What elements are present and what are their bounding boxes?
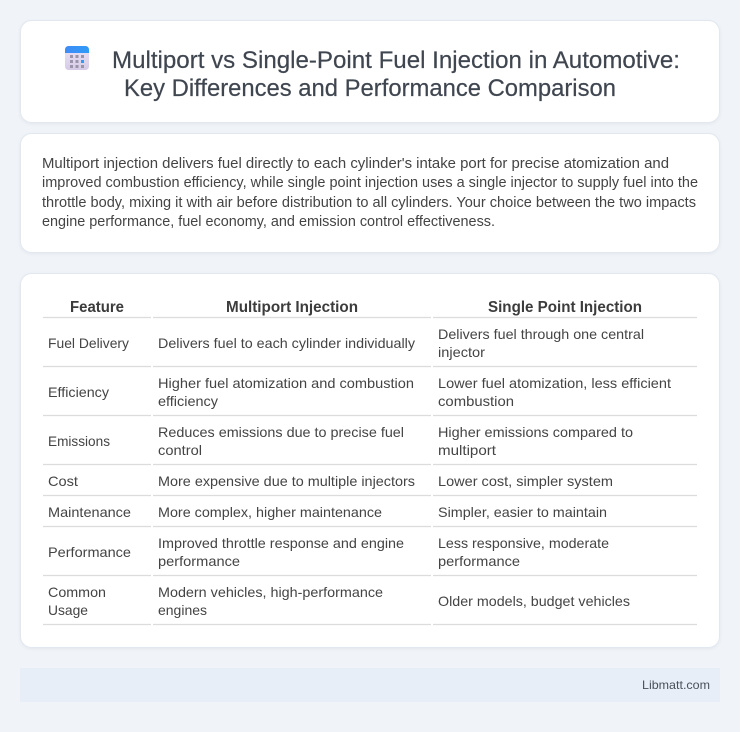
row: common usage: Usage <box>48 602 88 618</box>
row: performance: Improved throttle response and engine <box>158 535 404 551</box>
title: Multiport vs Single-Point Fuel Injection in Automotive: <box>112 47 680 74</box>
panel: introduction <box>20 134 720 252</box>
row: fuel delivery: Delivers fuel to each cylinder individually <box>158 335 415 351</box>
row: common usage: Common <box>48 584 106 600</box>
row: performance: Less responsive, moderate <box>438 535 609 551</box>
row: efficiency: Efficiency <box>48 384 109 400</box>
table header: Multiport Injection <box>226 299 358 316</box>
row: fuel delivery: Fuel Delivery <box>48 335 129 351</box>
footer <box>20 668 720 702</box>
row: maintenance <box>48 504 607 520</box>
row: common usage: Older models, budget vehicles <box>438 593 630 609</box>
row: cost: Cost <box>48 473 78 489</box>
row: performance: performance <box>438 553 520 569</box>
icon: calculator keypad <box>65 46 89 70</box>
row: performance: performance <box>158 553 240 569</box>
text block: introduction paragraph: engine performance, fuel economy, and emission control effectiveness. <box>42 214 495 230</box>
row: emissions <box>48 424 633 458</box>
text block: introduction paragraph: Multiport injection delivers fuel directly to each cylinder's intake port for precise atomization and <box>42 156 669 172</box>
row: efficiency: efficiency <box>158 393 218 409</box>
row: cost: More expensive due to multiple injectors <box>158 473 415 489</box>
text block: introduction paragraph: throttle body, mixing it with air before distribution to all cylinders. Your choice between the two impacts <box>42 195 696 211</box>
text block: introduction paragraph: improved combustion efficiency, while single point injection uses a single injector to supply fuel into the <box>42 175 698 191</box>
table header: Single Point Injection <box>488 299 642 316</box>
row: emissions: Reduces emissions due to precise fuel <box>158 424 404 440</box>
row: fuel delivery: Delivers fuel through one central <box>438 326 644 342</box>
row: cost <box>48 473 613 489</box>
table header: Feature <box>70 299 124 316</box>
row: common usage: Modern vehicles, high-performance <box>158 584 383 600</box>
row: emissions: control <box>158 442 202 458</box>
row: efficiency: Lower fuel atomization, less efficient <box>438 375 671 391</box>
row: emissions: Emissions <box>48 433 110 449</box>
table header <box>70 299 642 316</box>
row: cost: Lower cost, simpler system <box>438 473 613 489</box>
row: efficiency: Higher fuel atomization and combustion <box>158 375 414 391</box>
row: performance: Performance <box>48 544 131 560</box>
row: emissions: multiport <box>438 442 496 458</box>
row: fuel delivery <box>48 326 644 360</box>
panel: comparison table <box>20 274 720 648</box>
row: common usage: engines <box>158 602 207 618</box>
row: maintenance: More complex, higher maintenance <box>158 504 382 520</box>
row: emissions: Higher emissions compared to <box>438 424 633 440</box>
row: common usage <box>48 584 630 618</box>
row: performance <box>48 535 609 569</box>
footer brand text: Libmatt.com <box>642 678 710 692</box>
row: efficiency <box>48 375 671 409</box>
row: efficiency: combustion <box>438 393 514 409</box>
panel: title card <box>20 20 720 122</box>
title <box>112 47 680 102</box>
row: maintenance: Maintenance <box>48 504 131 520</box>
row: fuel delivery: injector <box>438 344 485 360</box>
row: maintenance: Simpler, easier to maintain <box>438 504 607 520</box>
text block: introduction paragraph <box>42 156 698 230</box>
title: Key Differences and Performance Comparison <box>124 75 616 102</box>
